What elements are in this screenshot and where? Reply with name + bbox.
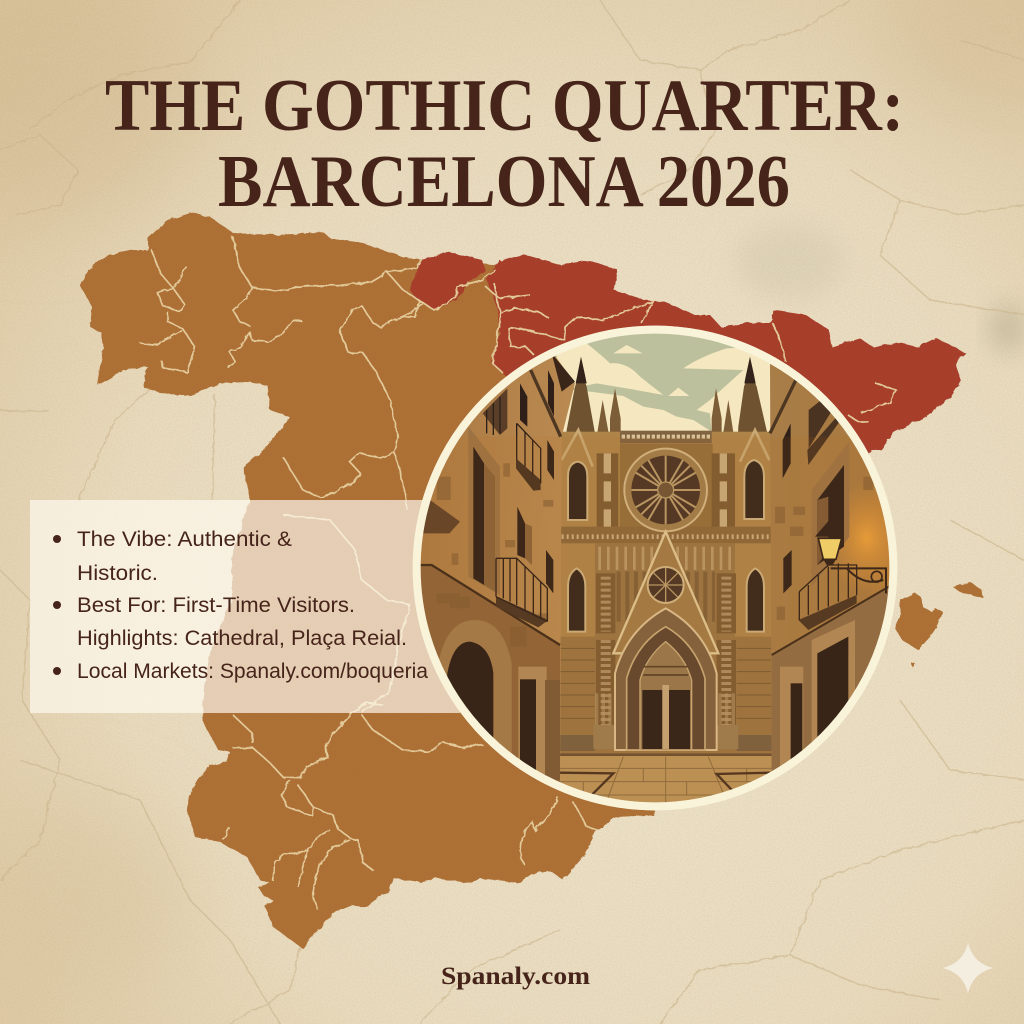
- wall stains: [436, 463, 554, 620]
- wall lantern with bracket: [815, 520, 886, 593]
- gable with small rose: [613, 532, 718, 653]
- wall stains: [775, 477, 873, 620]
- title: BARCELONA 2026: [218, 141, 790, 223]
- left arched doorway: [440, 620, 512, 753]
- panel: key facts: [30, 500, 460, 713]
- title: [105, 65, 904, 223]
- portal arches: [615, 608, 717, 750]
- bullet list: Local Markets: Spanaly.com/boqueria: [77, 660, 428, 683]
- bullet list: [53, 528, 428, 683]
- circular cathedral illustration: [403, 326, 910, 820]
- cathedral facade: [560, 430, 772, 753]
- left windows and balconies: [423, 370, 554, 627]
- map veins: [140, 237, 896, 910]
- right building: [768, 364, 890, 772]
- footer brand: Spanaly.com: [441, 963, 590, 990]
- right windows and balconies: [783, 398, 857, 630]
- region: main brown landmass: [80, 213, 983, 948]
- islands: [895, 587, 943, 650]
- towers and spires: [566, 356, 767, 432]
- sky with clouds: [555, 334, 770, 432]
- icon: sparkle star: [943, 943, 993, 993]
- bullet list: Best For: First-Time Visitors.: [77, 594, 355, 617]
- title: THE GOTHIC QUARTER:: [105, 65, 904, 147]
- map of Spain: [80, 213, 983, 948]
- bullet list: The Vibe: Authentic &: [77, 528, 292, 551]
- rose window: [624, 449, 707, 531]
- side windows: [568, 460, 764, 632]
- left building: [420, 356, 575, 782]
- bullet list: Historic.: [77, 562, 158, 585]
- region: red northern strip and Catalonia: [410, 252, 966, 560]
- ground plaza: [560, 753, 772, 802]
- bullet list: Highlights: Cathedral, Plaça Reial.: [77, 627, 407, 650]
